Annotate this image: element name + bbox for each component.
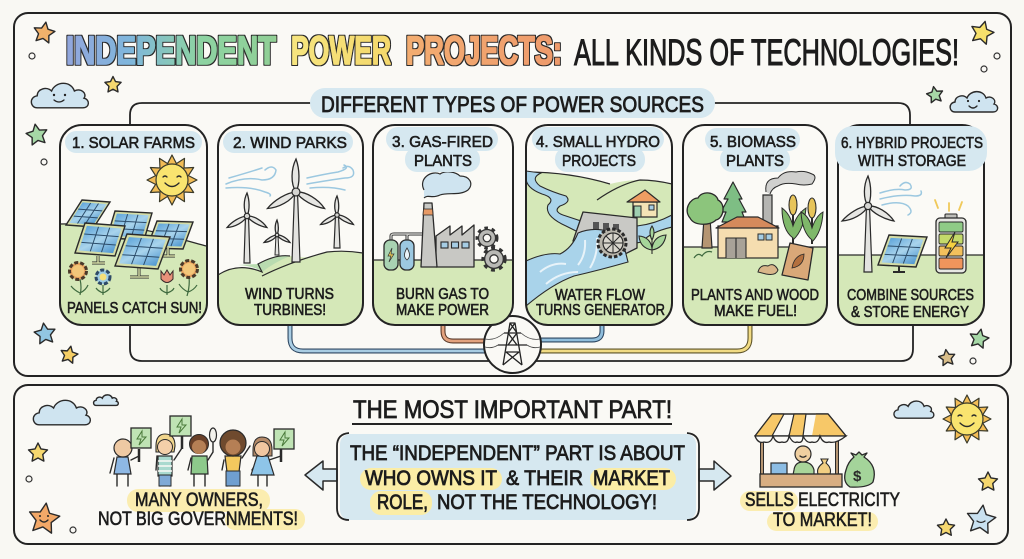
arrow: hydro to grid xyxy=(538,326,602,340)
caption: water flow turns generator: WATER FLOW xyxy=(555,287,646,304)
title: INDEPENDENT xyxy=(66,29,276,73)
illustration: wind turbines on hills xyxy=(218,159,363,325)
person 3 with magnifier xyxy=(188,428,216,486)
caption: combine sources and store energy: & STORE ENERGY xyxy=(851,304,969,321)
caption: panels catch sun: PANELS CATCH SUN! xyxy=(67,300,202,317)
caption: sells electricity to market: SELLS ELECTRICITY xyxy=(745,490,900,511)
callout: independent meaning xyxy=(337,433,699,520)
caption: combine sources and store energy: COMBINE SOURCES xyxy=(847,287,974,304)
arrow: biomass to grid xyxy=(538,326,750,351)
title xyxy=(66,29,959,73)
caption: wind turns turbines: TURBINES! xyxy=(254,302,326,319)
caption: sells electricity to market xyxy=(740,490,900,531)
label: small hydro projects: 4. SMALL HYDRO xyxy=(536,134,660,151)
panel: biomass plants xyxy=(683,125,827,325)
caption: plants and wood make fuel: MAKE FUEL! xyxy=(714,303,797,320)
panel: small hydro projects xyxy=(526,125,672,325)
label: gas-fired plants: PLANTS xyxy=(414,153,472,170)
illustration: market stall with seller and money bag xyxy=(755,414,874,487)
label: hybrid projects with storage: 6. HYBRID PROJECTS xyxy=(841,135,983,152)
decorative stars and clouds around the title xyxy=(25,18,1000,366)
arrow: left to owners xyxy=(305,461,337,490)
caption: burn gas to make power xyxy=(396,286,489,319)
panel: gas-fired plants xyxy=(373,125,513,325)
label: hybrid projects with storage xyxy=(835,126,987,171)
label: small hydro projects: PROJECTS xyxy=(562,153,636,170)
callout: independent meaning: THE “INDEPENDENT” PART IS ABOUT xyxy=(350,442,685,465)
label: hybrid projects with storage: WITH STORAGE xyxy=(858,153,966,170)
panel: hybrid projects with storage xyxy=(835,125,987,325)
panel: wind parks xyxy=(218,125,363,325)
arrow: right to market xyxy=(699,461,731,490)
illustration: solar panels, sun and flowers xyxy=(60,155,210,325)
label: small hydro projects xyxy=(532,127,664,172)
title: PROJECTS: xyxy=(406,29,562,73)
caption: many owners, not big governments: MANY OWNERS, xyxy=(135,490,263,511)
caption: wind turns turbines: WIND TURNS xyxy=(245,286,334,303)
illustration: market stall with seller and money bag: $ xyxy=(853,468,862,485)
caption: sells electricity to market: TO MARKET! xyxy=(773,510,872,531)
illustration: biomass farm with trees, corn and sack xyxy=(683,171,827,325)
decorations: clouds, stars and sun xyxy=(26,395,998,535)
label: biomass plants: 5. BIOMASS xyxy=(710,134,796,151)
person 2 with sign xyxy=(156,416,191,486)
caption: burn gas to make power: MAKE POWER xyxy=(396,302,489,319)
label: gas-fired plants xyxy=(386,127,498,172)
person 5 with sign xyxy=(251,429,294,486)
arrow: gas plants to grid xyxy=(443,326,486,341)
panel: power sources xyxy=(14,13,1011,376)
illustration: gas plant with tanks, gears and smoke xyxy=(373,172,513,325)
callout: independent meaning: & THEIR xyxy=(506,467,583,490)
label: solar farms: 1. SOLAR FARMS xyxy=(72,135,195,152)
callout: independent meaning: NOT THE TECHNOLOGY! xyxy=(437,491,657,514)
connector frame xyxy=(130,103,913,361)
caption: many owners, not big governments: NOT BIG GOVERNMENTS! xyxy=(98,509,298,530)
caption: many owners, not big governments xyxy=(98,489,305,530)
caption: water flow turns generator: TURNS GENERATOR xyxy=(536,302,665,319)
icon: transmission tower hub xyxy=(484,316,541,373)
title: POWER xyxy=(291,29,391,73)
label: biomass plants xyxy=(705,128,800,172)
caption: water flow turns generator xyxy=(536,287,665,319)
label: wind parks: 2. WIND PARKS xyxy=(233,135,347,152)
illustration: river, dam, water wheel and house xyxy=(526,171,672,325)
callout: independent meaning: WHO OWNS IT xyxy=(365,467,497,490)
person 4 xyxy=(220,430,250,486)
illustration: turbine, solar panel and battery xyxy=(838,176,984,325)
panel: solar farms xyxy=(60,125,210,325)
heading: different types of power sources: DIFFERENT TYPES OF POWER SOURCES xyxy=(321,92,704,117)
illustration: group of owners with signs xyxy=(110,416,294,486)
callout: independent meaning: MARKET xyxy=(593,467,670,490)
heading: the most important part: THE MOST IMPORTANT PART! xyxy=(353,396,672,424)
caption: combine sources and store energy xyxy=(847,287,974,321)
caption: plants and wood make fuel: PLANTS AND WOOD xyxy=(691,287,819,304)
callout: independent meaning: ROLE, xyxy=(377,491,428,514)
caption: plants and wood make fuel xyxy=(691,287,819,320)
panel: the most important part xyxy=(14,385,1008,544)
person 1 with sign xyxy=(110,428,151,486)
label: gas-fired plants: 3. GAS-FIRED xyxy=(392,134,493,151)
arrow: wind parks to grid xyxy=(290,326,486,351)
caption: burn gas to make power: BURN GAS TO xyxy=(396,286,489,303)
label: biomass plants: PLANTS xyxy=(726,153,784,170)
caption: wind turns turbines xyxy=(245,286,334,319)
